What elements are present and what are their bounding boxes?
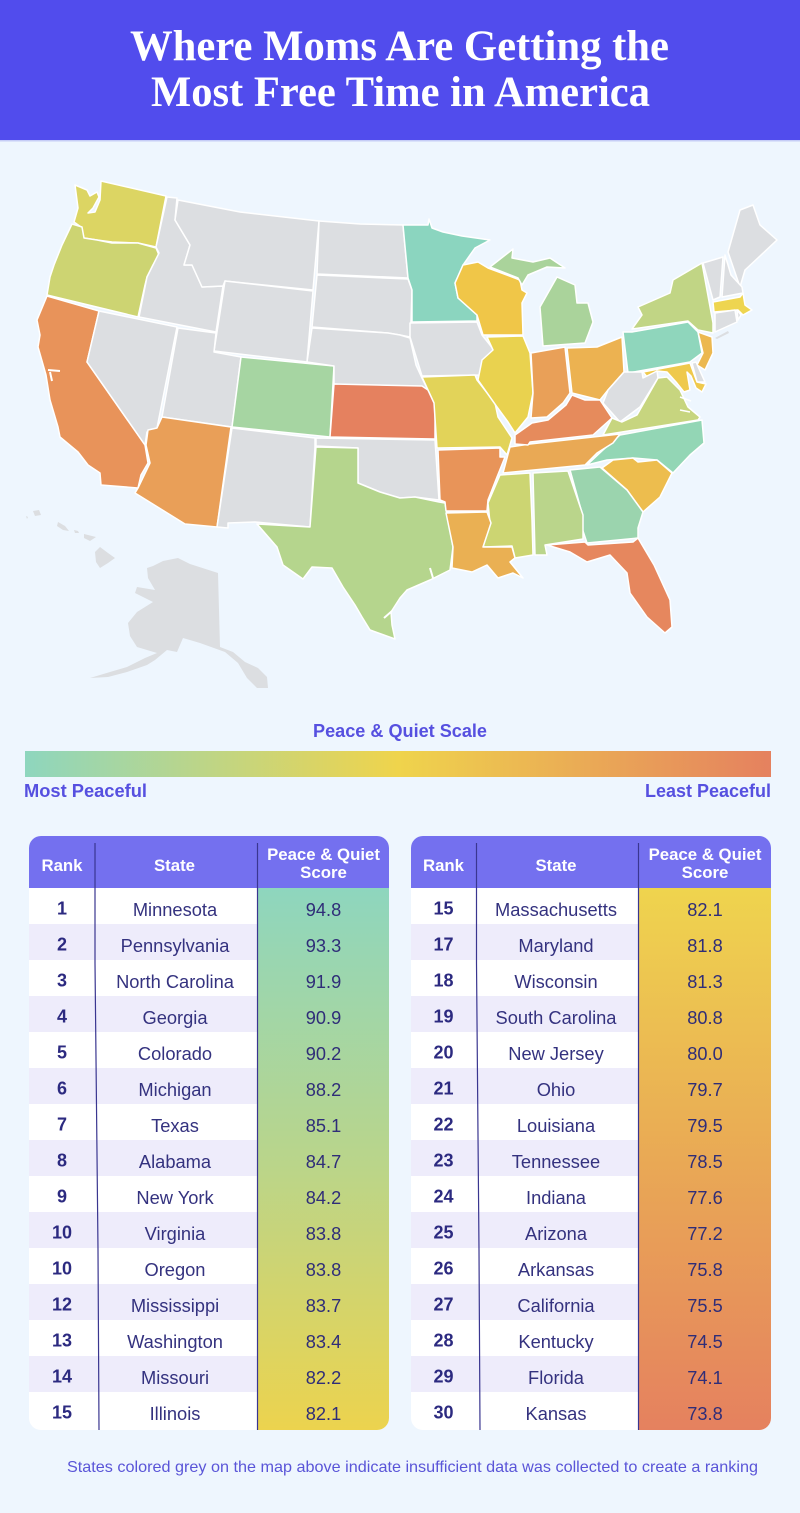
table rows: Florida [528, 1367, 585, 1388]
New Jersey [697, 332, 713, 370]
table rows: 90.2 [306, 1044, 341, 1064]
scale label: most peaceful: Most Peaceful [24, 780, 147, 801]
Galveston Bay [384, 568, 433, 618]
table rows: 26 [433, 1258, 454, 1278]
table rows: 22 [433, 1114, 454, 1134]
Kansas [330, 384, 435, 439]
Virginia [603, 377, 700, 435]
Kentucky [515, 395, 612, 445]
title banner [0, 0, 800, 142]
table rows: 18 [433, 970, 454, 990]
Vermont [703, 257, 723, 300]
Iowa [410, 322, 494, 376]
table header: State [154, 856, 195, 875]
North Dakota [317, 221, 408, 278]
table rows: 15 [52, 1402, 72, 1422]
Washington [74, 181, 166, 247]
table header: Peace & Quiet [649, 845, 762, 864]
title banner: Most Free Time in America [151, 69, 650, 116]
table header: State [535, 856, 577, 875]
table rows: 75.8 [687, 1260, 723, 1280]
South Dakota [312, 275, 412, 337]
table rows: California [517, 1295, 595, 1316]
table rows: 82.1 [306, 1404, 341, 1424]
Alabama [533, 471, 583, 555]
table rows: 77.2 [687, 1224, 723, 1244]
New Hampshire [722, 255, 743, 297]
table rows: 88.2 [306, 1080, 341, 1100]
Rhode Island [737, 310, 741, 320]
table rows: 1 [57, 898, 67, 918]
table: ranks 1 to 15 [29, 836, 389, 1430]
table rows: 82.2 [306, 1368, 341, 1388]
table rows: 85.1 [306, 1116, 341, 1136]
Mississippi [483, 473, 533, 558]
South Carolina [602, 458, 672, 512]
table rows: Colorado [138, 1043, 212, 1064]
table rows: 4 [57, 1006, 67, 1026]
table rows: Kansas [526, 1403, 586, 1424]
table rows: 78.5 [687, 1152, 723, 1172]
table rows: 2 [57, 934, 67, 954]
table rows: North Carolina [116, 971, 235, 992]
California [37, 296, 148, 488]
table rows: 83.4 [306, 1332, 341, 1352]
table rows [433, 898, 723, 1424]
Georgia [570, 467, 643, 543]
table rows: 27 [433, 1294, 454, 1314]
table rows: 75.5 [687, 1296, 723, 1316]
table rows: 14 [52, 1366, 72, 1386]
table rows: 7 [57, 1114, 67, 1134]
table rows: 21 [433, 1078, 454, 1098]
table rows: 77.6 [687, 1188, 723, 1208]
Utah [162, 328, 241, 427]
table rows: Massachusetts [495, 899, 617, 920]
table rows: 81.8 [687, 936, 723, 956]
Colorado [232, 357, 334, 437]
Pennsylvania [623, 322, 702, 373]
table rows: Missouri [141, 1367, 209, 1388]
North Carolina [587, 420, 704, 473]
Montana [175, 200, 319, 290]
table rows: Indiana [526, 1187, 587, 1208]
table rows: 30 [433, 1402, 454, 1422]
table rows: 3 [57, 970, 67, 990]
table header: Rank [423, 856, 465, 875]
Oregon [47, 224, 159, 317]
New York [632, 263, 713, 333]
table rows: 15 [433, 898, 454, 918]
table rows: 80.0 [687, 1044, 723, 1064]
Nebraska [307, 328, 428, 390]
table rows: 79.7 [687, 1080, 723, 1100]
West Virginia [603, 371, 658, 422]
table rows: Maryland [518, 935, 594, 956]
table rows: 29 [433, 1366, 454, 1386]
table rows: Oregon [145, 1259, 205, 1280]
Michigan upper peninsula [490, 249, 565, 285]
table rows: Arizona [525, 1223, 588, 1244]
table rows: 79.5 [687, 1116, 723, 1136]
Wisconsin [455, 262, 527, 335]
Chesapeake inlets [680, 397, 691, 412]
table rows: 17 [433, 934, 454, 954]
footnote: States colored grey on the map above indicate insufficient data was collected to create a ranking [67, 1459, 758, 1476]
table rows: 91.9 [306, 972, 341, 992]
Michigan lower peninsula [540, 277, 593, 346]
Tennessee [503, 434, 620, 473]
table header: Score [682, 863, 728, 882]
table rows: 80.8 [687, 1008, 723, 1028]
table rows: 25 [433, 1222, 454, 1242]
table rows: Georgia [142, 1007, 208, 1028]
table rows: New Jersey [508, 1043, 605, 1064]
Massachusetts [713, 293, 752, 315]
Arkansas [438, 448, 505, 511]
table rows: 84.2 [306, 1188, 341, 1208]
Wyoming [214, 281, 313, 362]
table rows: 83.8 [306, 1260, 341, 1280]
table header [423, 845, 762, 882]
Connecticut [715, 310, 737, 332]
scale label: least peaceful: Least Peaceful [645, 780, 771, 801]
table rows: 94.8 [306, 900, 341, 920]
table rows: New York [136, 1187, 214, 1208]
table rows: 81.3 [687, 972, 723, 992]
Oklahoma [316, 438, 439, 500]
table rows: 84.7 [306, 1152, 341, 1172]
table rows: 5 [57, 1042, 67, 1062]
Ohio [567, 337, 624, 400]
Minnesota [403, 219, 490, 322]
table rows: 82.1 [687, 900, 723, 920]
table rows: Michigan [138, 1079, 212, 1100]
table rows: 10 [52, 1222, 72, 1242]
Delaware [692, 362, 705, 382]
table rows: Wisconsin [514, 971, 598, 992]
map of US states by peace and quiet score [26, 181, 777, 688]
scale gradient bar [25, 751, 771, 777]
Maryland [643, 363, 706, 392]
table rows: 74.1 [687, 1368, 723, 1388]
table rows: 8 [57, 1150, 67, 1170]
table rows: 6 [57, 1078, 67, 1098]
table rows: Tennessee [512, 1151, 600, 1172]
San Francisco Bay [48, 370, 60, 381]
table rows: 90.9 [306, 1008, 341, 1028]
table rows: Illinois [150, 1403, 200, 1424]
table rows: 20 [433, 1042, 454, 1062]
Maine [728, 205, 777, 287]
table: ranks 15 to 30 [411, 836, 771, 1430]
Florida [547, 538, 672, 633]
table rows: 23 [433, 1150, 454, 1170]
table rows: Mississippi [131, 1295, 219, 1316]
table rows: 19 [433, 1006, 454, 1026]
table rows: 28 [433, 1330, 454, 1350]
scale title: Peace & Quiet Scale [313, 720, 487, 741]
table rows: Ohio [537, 1079, 575, 1100]
table rows: South Carolina [496, 1007, 617, 1028]
table rows: 93.3 [306, 936, 341, 956]
Alaska [90, 558, 268, 688]
Indiana [531, 347, 570, 418]
title banner: Where Moms Are Getting the [130, 23, 669, 70]
table rows: Washington [127, 1331, 223, 1352]
table rows: 10 [52, 1258, 72, 1278]
Louisiana [446, 512, 523, 578]
table rows: Pennsylvania [121, 935, 230, 956]
table rows: 74.5 [687, 1332, 723, 1352]
table rows: Kentucky [518, 1331, 594, 1352]
table header [41, 845, 380, 882]
table header: Rank [41, 856, 83, 875]
New Mexico [217, 428, 315, 528]
table rows: 24 [433, 1186, 454, 1206]
table rows: 13 [52, 1330, 72, 1350]
table rows: Arkansas [518, 1259, 594, 1280]
Illinois [478, 336, 533, 433]
Nevada [87, 311, 177, 445]
Missouri [422, 375, 512, 455]
table rows: Texas [151, 1115, 199, 1136]
table header: Peace & Quiet [267, 845, 380, 864]
table rows: 83.7 [306, 1296, 341, 1316]
table rows: Alabama [139, 1151, 212, 1172]
table rows: Virginia [145, 1223, 206, 1244]
table rows: 83.8 [306, 1224, 341, 1244]
table rows: 73.8 [687, 1404, 723, 1424]
table rows [52, 898, 341, 1424]
table rows: 12 [52, 1294, 72, 1314]
table rows: Minnesota [133, 899, 218, 920]
table rows: Louisiana [517, 1115, 596, 1136]
table header: Score [300, 863, 347, 882]
Idaho [139, 197, 223, 332]
Hawaii [26, 510, 115, 568]
Texas [257, 447, 453, 639]
Long Island [715, 331, 729, 339]
table rows: 9 [57, 1186, 67, 1206]
Arizona [135, 417, 231, 527]
